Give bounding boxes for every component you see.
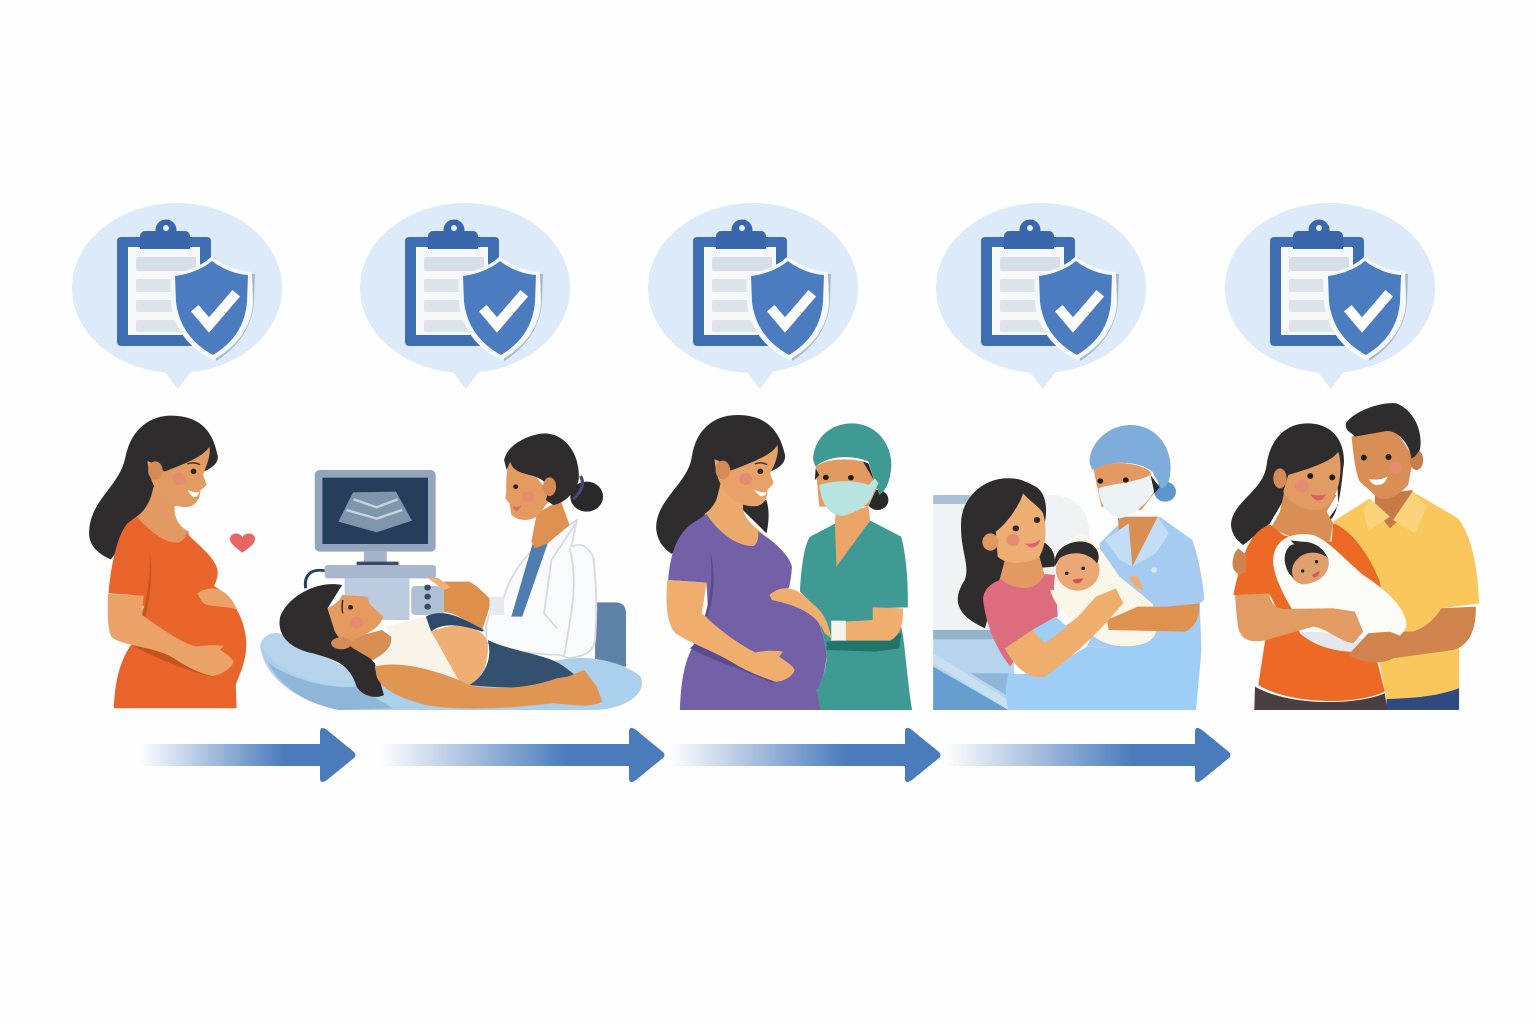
pregnant woman [656, 415, 831, 710]
icon: checklist shield bubble, stage 2 [360, 203, 570, 389]
ultrasound machine [305, 470, 444, 620]
blanket [1006, 630, 1201, 710]
icon: checklist shield bubble, stage 3 [648, 203, 858, 389]
mother [1231, 423, 1387, 710]
doctor [426, 433, 603, 658]
arrow 4 [945, 728, 1230, 782]
scene: family with newborn [1231, 403, 1479, 710]
nurse in blue [1087, 425, 1204, 650]
chair back [595, 602, 626, 667]
icon: checklist shield bubble, stage 5 [1225, 203, 1435, 389]
scene: new mother in bed with baby and nurse [933, 425, 1204, 710]
newborn in cream swaddle [1050, 533, 1157, 646]
patient lying down [280, 584, 602, 709]
nurse in teal scrubs [800, 423, 912, 710]
icon: checklist shield bubble, stage 1 [72, 203, 282, 389]
icon: checklist shield bubble, stage 4 [936, 203, 1146, 389]
arms holding baby [1005, 576, 1200, 677]
icon: heart [230, 533, 255, 553]
exam bed and pillow [260, 633, 642, 710]
scene: pregnant woman in purple with nurse in green [656, 415, 912, 710]
newborn in white swaddle [1273, 534, 1406, 652]
scene: ultrasound examination [260, 433, 642, 710]
hospital bed [933, 495, 1089, 710]
arrow 2 [380, 728, 664, 782]
arrow 3 [670, 728, 940, 782]
arrow 1 [140, 728, 356, 782]
father's hand [1348, 632, 1406, 662]
scene: expectant mother in orange dress with heart [89, 416, 255, 708]
mother's arm and hand [1235, 593, 1363, 643]
mother [958, 478, 1058, 667]
father [1333, 403, 1479, 710]
